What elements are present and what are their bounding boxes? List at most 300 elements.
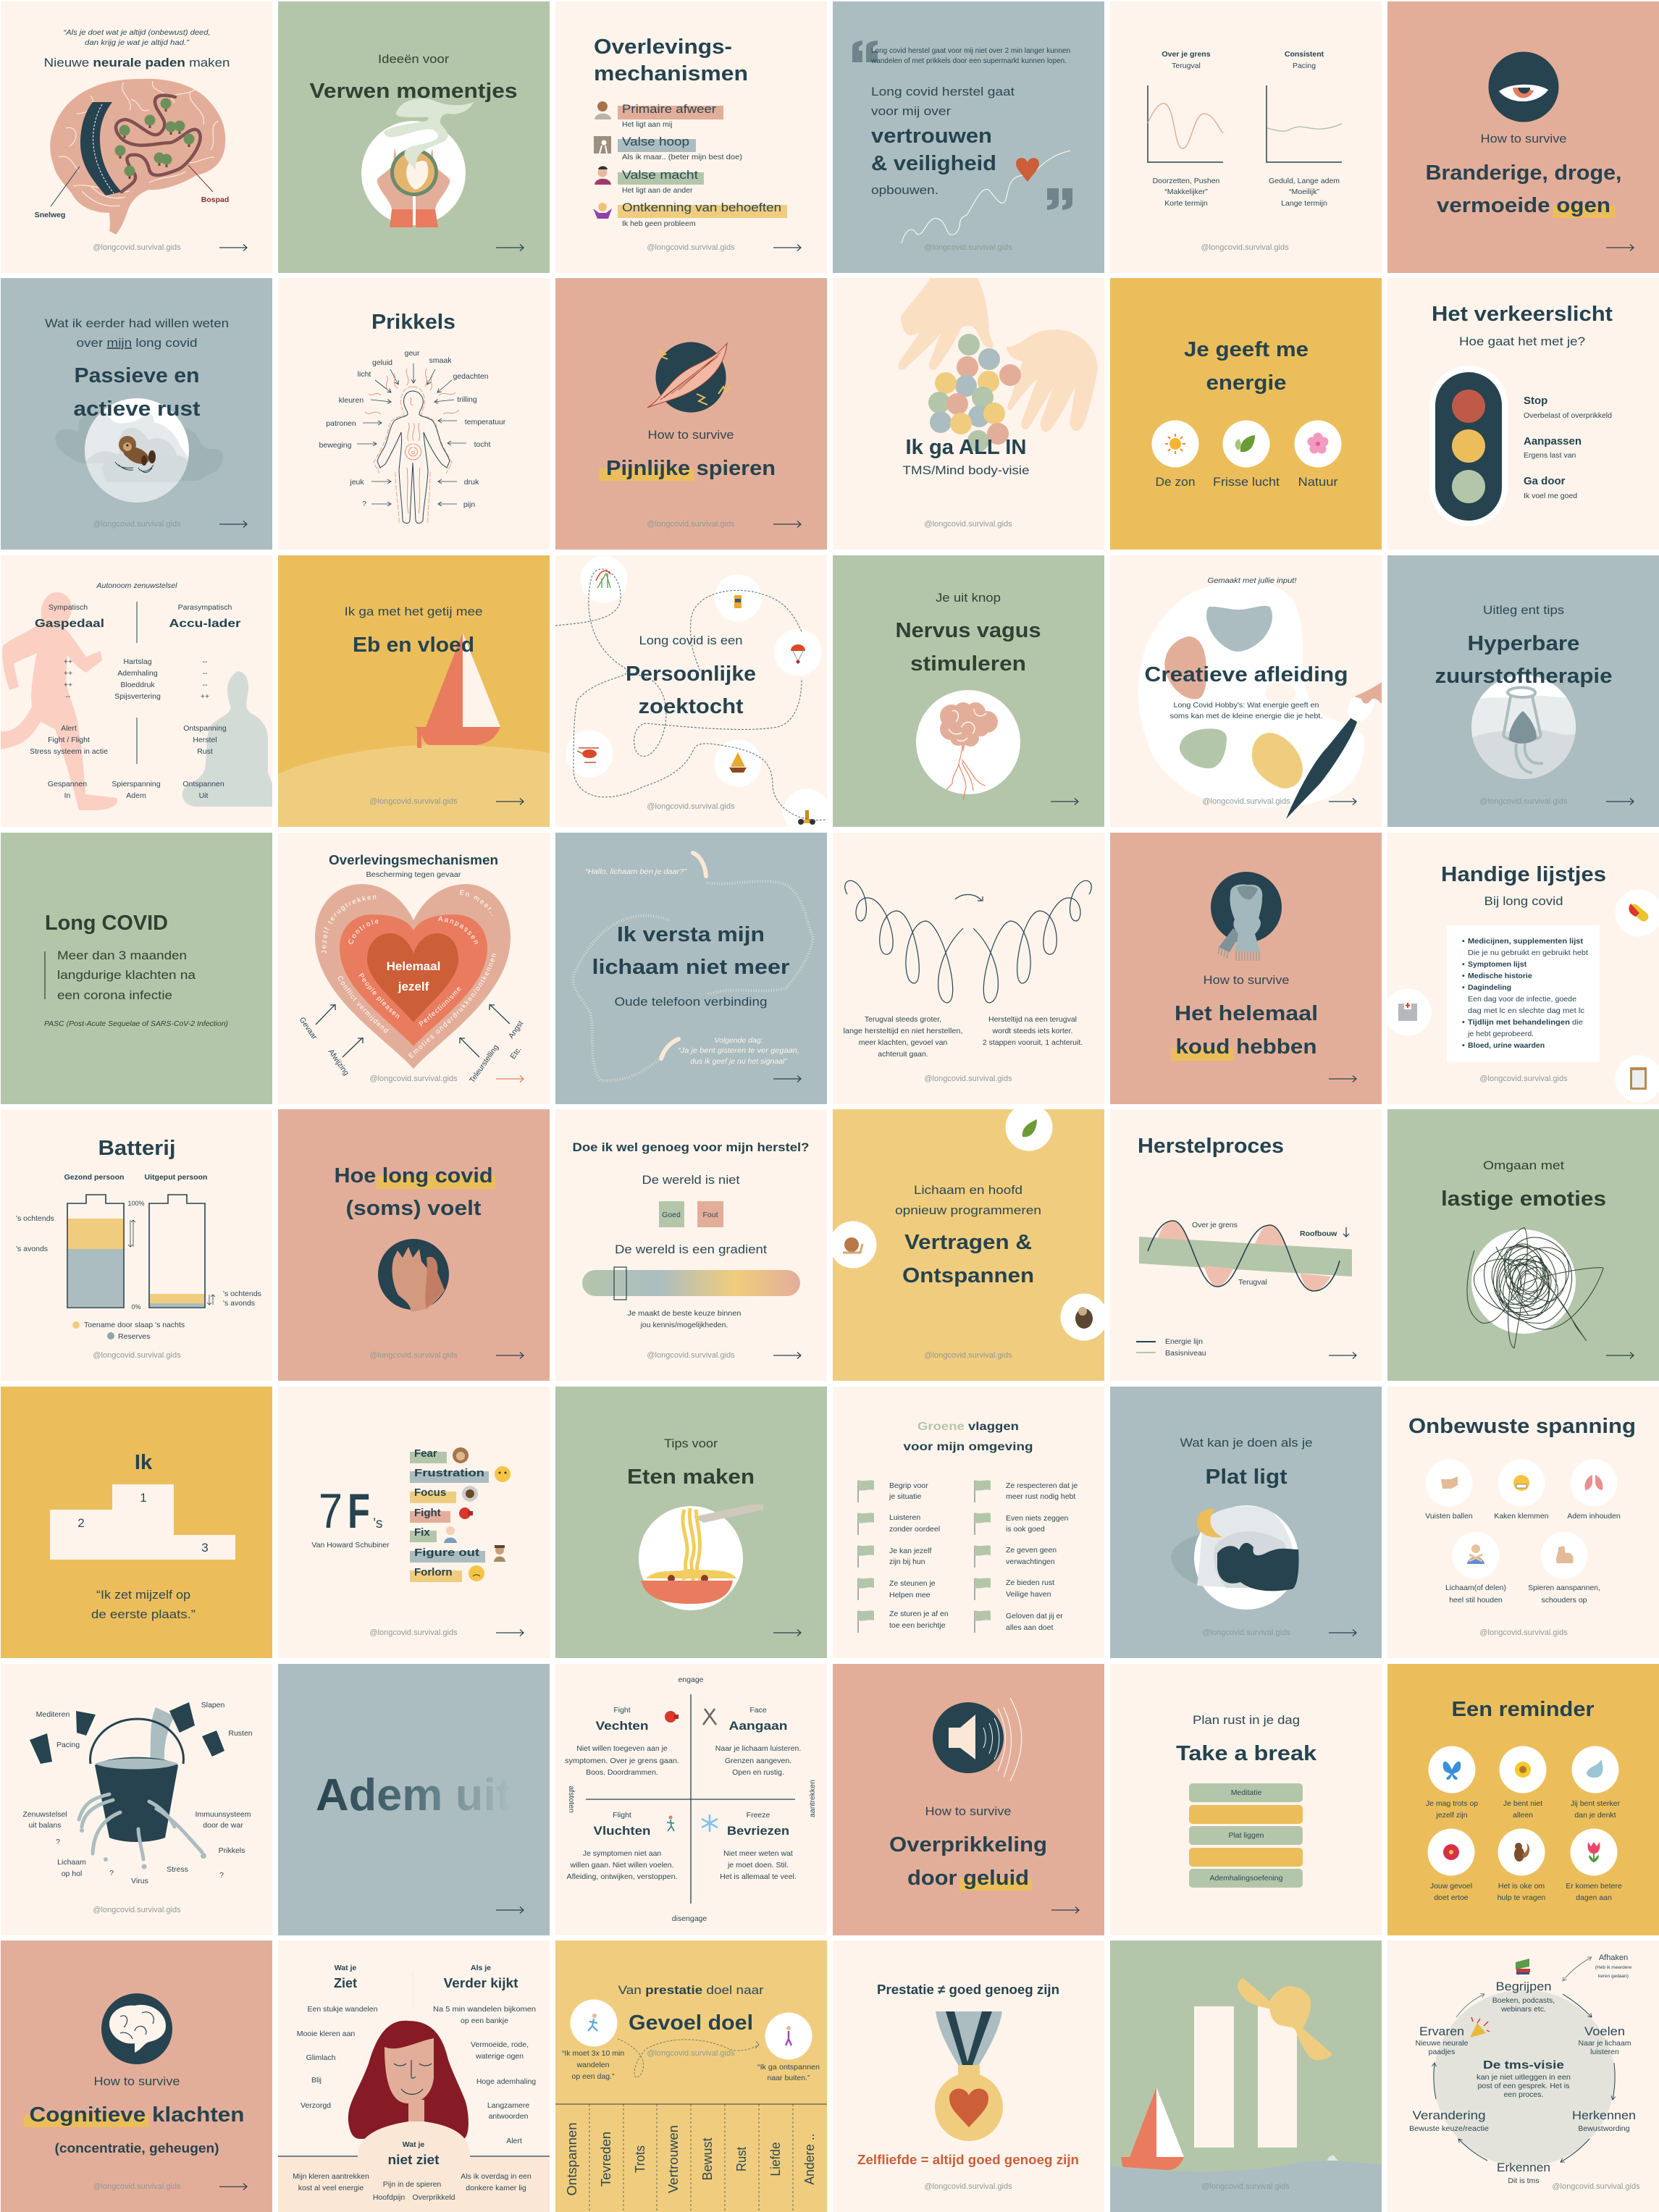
icon: hospital — [1385, 989, 1431, 1035]
labels: druk — [464, 478, 479, 487]
labels: Lichaam — [57, 1858, 86, 1867]
icon: muscle — [647, 342, 731, 413]
subtitle: over mijn long covid — [77, 336, 197, 350]
states: Herstel — [193, 736, 217, 744]
subtitle: Uitleg ent tips — [1483, 603, 1564, 617]
step: begrijpen: Begrijpen — [1496, 1980, 1551, 1993]
list: valse hoop: Als ik maar.. (beter mijn best doe) — [622, 153, 742, 161]
item: vuisten ballen: Vuisten ballen — [1425, 1512, 1473, 1521]
heading: Het verkeerslicht — [1432, 303, 1613, 326]
chart captions: “Moeilijk” — [1289, 188, 1320, 196]
labels and arrows: 's ochtends — [223, 1290, 261, 1298]
list panel — [1447, 925, 1600, 1062]
handle: @longcovid.survival.gids — [1202, 1628, 1290, 1637]
step: verandering: Verandering — [1412, 2108, 1486, 2122]
arrow — [1051, 798, 1078, 805]
panel: ik ga all in — [833, 278, 1104, 550]
quadrant: flight: Afleiding, ontwijken, verstoppen. — [566, 1872, 678, 1881]
text: right — [983, 1015, 1083, 1047]
text: right column: verwachtingen — [1006, 1557, 1055, 1566]
quote: second: dus ik geef je nu het signaal” — [690, 1057, 787, 1066]
panel: hyperbare zuurstoftherapie — [1387, 555, 1659, 827]
arrow — [773, 1076, 801, 1082]
labels: smaak — [429, 356, 452, 365]
main statement: voor mij over — [871, 104, 951, 118]
panel: vertrouwen quote — [833, 1, 1104, 273]
comparison table: -- — [203, 669, 208, 678]
text: left column: toe een berichtje — [889, 1621, 946, 1630]
illustration: sleeping figure — [1171, 1505, 1299, 1610]
diagram: nested hearts: Controle — [348, 920, 378, 944]
quadrant: fight: Boos. Doordrammen. — [586, 1768, 658, 1777]
breathing — [48, 781, 224, 798]
states: Stress systeem in actie — [30, 747, 108, 756]
chart: terugval — [1148, 85, 1223, 162]
illustration: hands with balls — [898, 278, 1098, 452]
comparison table: Ademhaling — [117, 669, 158, 678]
breathing: Uit — [199, 791, 208, 800]
heading: Ik — [135, 1451, 153, 1474]
icon: medal — [935, 2011, 1003, 2141]
panel: groene vlaggen — [833, 1387, 1104, 1658]
quote marks — [852, 41, 1072, 210]
labels: Zenuwstelsel — [22, 1810, 67, 1819]
handle: @longcovid.survival.gids — [1552, 2182, 1640, 2191]
heading — [902, 1231, 1034, 1287]
handle: @longcovid.survival.gids — [1479, 797, 1568, 806]
icon: clipboard — [1615, 1056, 1659, 1102]
heading: stimuleren — [910, 652, 1026, 676]
heading: Overlevingsmechanismen — [329, 853, 498, 867]
heading: Creatieve afleiding — [1144, 663, 1348, 686]
list panel: • — [1462, 1041, 1465, 1050]
heading: energie — [1206, 371, 1286, 395]
arrow — [1606, 798, 1634, 805]
afhaken note: (Heb ik meerdere — [1595, 1965, 1631, 1970]
text: left column: Ze sturen je af en — [889, 1610, 949, 1618]
highlight — [600, 468, 694, 481]
subtitle — [45, 316, 229, 350]
labels: Rusten — [228, 1729, 253, 1738]
conclusion: Zelfliefde = altijd goed genoeg zijn — [857, 2153, 1079, 2167]
panel: 7 Fs — [278, 1387, 550, 1658]
labels: Slapen — [201, 1701, 225, 1710]
labels: gedachten — [453, 372, 489, 381]
step: begrijpen — [1492, 1959, 1555, 2014]
handle: @longcovid.survival.gids — [93, 2182, 181, 2191]
heading — [1184, 338, 1309, 395]
comparison table: ++ — [201, 692, 209, 701]
chart: full battery — [67, 1195, 124, 1308]
subtitle: Long covid is een — [639, 634, 743, 647]
heading: Ontspannen — [902, 1264, 1034, 1287]
list: seven Fs: Fear — [414, 1447, 437, 1460]
subtitle: Omgaan met — [1483, 1158, 1564, 1172]
heading: door geluid — [907, 1867, 1029, 1890]
list panel: Dagindeling — [1468, 983, 1511, 992]
main statement — [871, 85, 1015, 197]
bottom band — [278, 2156, 550, 2212]
text: right: 2 stappen vooruit, 1 achteruit. — [983, 1038, 1083, 1047]
list panel: Tijdlijn met behandelingen die — [1468, 1018, 1583, 1027]
states: Fight / Flight — [48, 736, 90, 744]
dashed route — [555, 569, 827, 820]
heading — [74, 364, 201, 421]
icon: leaf — [1005, 1103, 1053, 1151]
icon: eye — [1489, 52, 1558, 122]
text: visible symptoms left: Mooie kleren aan — [297, 2030, 355, 2038]
labels: Immuunsysteem — [195, 1810, 251, 1819]
quadrant: freeze: Niet meer weten wat — [723, 1849, 793, 1858]
quadrant: flight: Flight — [613, 1811, 631, 1820]
legend — [72, 1321, 185, 1341]
step: herkennen: Herkennen — [1572, 2108, 1636, 2122]
labels: Prikkels — [219, 1846, 245, 1855]
text: visible symptoms left: Glimlach — [306, 2053, 336, 2062]
illustration: pasta bowl — [639, 1505, 763, 1610]
subtitle: Ik ga met het getij mee — [345, 605, 482, 618]
diagram: nested hearts — [315, 884, 511, 1069]
chart captions: Lange termijn — [1281, 199, 1327, 208]
description: Long Covid Hobby's: Wat energie geeft en — [1173, 701, 1319, 710]
text: visible symptoms left: Blij — [311, 2076, 322, 2085]
labels: temperatuur — [465, 418, 506, 426]
subtitle: Ideeën voor — [378, 52, 449, 66]
handle: @longcovid.survival.gids — [1479, 1628, 1568, 1637]
text: looking further right — [433, 2005, 536, 2145]
heading: Overlevings- — [594, 35, 732, 59]
diagram: nested hearts: Aanpassen — [438, 917, 478, 944]
heading: lastige emoties — [1441, 1187, 1606, 1211]
panel: overprikkeling door geluid — [833, 1664, 1104, 1935]
column headings: Wat je — [335, 1964, 356, 1972]
text: left — [843, 1015, 963, 1059]
text: left column: Ze steunen je — [889, 1579, 936, 1588]
icon: sloth — [1060, 1293, 1108, 1341]
top note: Gemaakt met jullie input! — [1208, 576, 1297, 585]
heading: Eb en vloed — [353, 634, 474, 657]
icon: snail — [830, 1221, 876, 1269]
step: verandering: Bewuste keuze/reactie — [1409, 2124, 1489, 2133]
list panel: • — [1462, 937, 1465, 946]
labels and arrows: 0% — [131, 1303, 141, 1311]
icon: seagull — [1327, 2156, 1338, 2161]
diagram: nested hearts: Conflict vermijdend — [338, 976, 389, 1033]
text: looking further right: Hoge ademhaling — [476, 2077, 536, 2086]
column titles: Terugval — [1172, 62, 1201, 70]
illustration: brain and vagus nerve — [916, 690, 1020, 800]
subtitle: Oude telefoon verbinding — [614, 995, 768, 1009]
arrow — [773, 521, 801, 527]
feelings column labels: Ontspannen — [565, 2122, 579, 2196]
labels: ? — [219, 1871, 224, 1880]
quadrant: face — [703, 1706, 801, 1777]
definition: Meer dan 3 maanden — [57, 949, 187, 962]
diagram: nested hearts: Emoties onderdrukken/ontkennen — [408, 954, 496, 1059]
quadrant: fight: Niet willen toegeven aan je — [576, 1744, 668, 1753]
handle: @longcovid.survival.gids — [647, 2049, 735, 2058]
labels: geur — [404, 349, 420, 358]
item: spieren aanspannen: Spieren aanspannen, — [1528, 1584, 1600, 1592]
labels: jeuk — [349, 478, 364, 487]
panel: pacing charts — [1110, 1, 1382, 273]
panel: passieve en actieve rust — [1, 278, 272, 550]
text: not visible: Pijn in de spieren — [383, 2180, 441, 2189]
panel: eb en vloed — [278, 555, 550, 827]
diagram: nested hearts: jezelf — [398, 980, 429, 993]
panel: cognitieve klachten — [1, 1940, 272, 2212]
handle: @longcovid.survival.gids — [369, 1628, 458, 1637]
labels: op hol — [62, 1870, 82, 1878]
heading: Prestatie ≠ goed genoeg zijn — [877, 1982, 1059, 1997]
panel: een reminder — [1387, 1664, 1659, 1935]
subtitle: How to survive — [1480, 132, 1567, 146]
heading: Overprikkeling — [889, 1833, 1047, 1856]
icon: hands holding coffee — [361, 98, 474, 227]
labels: tocht — [474, 440, 490, 449]
quotes: “Ik ga ontspannen — [757, 2063, 820, 2072]
column headings: Ziet — [334, 1976, 357, 1990]
quote: “Als je doet wat je altijd (onbewust) deed, — [64, 28, 210, 37]
title: 7Fs: Van Howard Schubiner — [311, 1541, 390, 1549]
heading — [1435, 632, 1612, 688]
labels: Stress — [167, 1865, 188, 1874]
icons: flags — [858, 1480, 991, 1633]
main statement: Long covid herstel gaat — [871, 85, 1015, 98]
item: kaken klemmen: Kaken klemmen — [1494, 1512, 1549, 1521]
quote — [64, 28, 210, 47]
handle: @longcovid.survival.gids — [93, 1906, 181, 1914]
subtitle: Bij long covid — [1484, 894, 1563, 908]
heading: vermoeide ogen — [1437, 194, 1610, 217]
axes: engage — [678, 1675, 704, 1684]
text: right column: meer rust nodig hebt — [1006, 1492, 1075, 1501]
heading: Een reminder — [1451, 1698, 1595, 1721]
heading: Take a break — [1176, 1742, 1317, 1765]
labels: De zon — [1156, 475, 1195, 489]
list panel: Medicijnen, supplementen lijst — [1468, 937, 1584, 946]
handle: @longcovid.survival.gids — [369, 1075, 458, 1083]
table lines — [555, 2103, 827, 2105]
heading: actieve rust — [74, 398, 201, 421]
panel: batterij — [1, 1109, 272, 1381]
feelings column labels: Liefde — [768, 2142, 783, 2177]
panel: overlevingsmechanismen hart — [278, 833, 550, 1104]
column headings: Als je — [471, 1964, 491, 1972]
quadrant: freeze: Bevriezen — [727, 1824, 789, 1838]
list panel: • — [1462, 960, 1465, 969]
chart: energy wave: Over je grens — [1192, 1221, 1238, 1229]
panel: ik podium — [1, 1387, 272, 1658]
heading: Branderige, droge, — [1425, 161, 1622, 185]
comparison table: -- — [203, 657, 208, 666]
column titles — [64, 1173, 207, 1182]
heading: Handige lijstjes — [1441, 863, 1606, 886]
subtitle: Van prestatie doel naar — [618, 1983, 764, 1997]
chart captions: “Makkelijker” — [1164, 188, 1208, 196]
icon: hands on face — [378, 1239, 449, 1312]
heading: Nervus vagus — [895, 619, 1041, 642]
arrow — [496, 1907, 524, 1913]
labels: geluid — [372, 358, 392, 367]
heading: lichaam niet meer — [592, 956, 789, 979]
legend — [1136, 1337, 1206, 1358]
arrow — [1329, 1353, 1356, 1358]
podium: 3 — [201, 1541, 209, 1555]
arrows — [357, 363, 466, 504]
list: primaire afweer: Het ligt aan mij — [622, 120, 672, 129]
item: adem inhouden: Adem inhouden — [1567, 1512, 1621, 1521]
quote: second: Volgende dag: — [714, 1036, 763, 1045]
text: left column: zijn bij hun — [889, 1557, 925, 1566]
text: left column: je situatie — [889, 1492, 922, 1501]
column titles — [1162, 50, 1324, 70]
afhaken note: keren gedaan) — [1598, 1974, 1629, 1979]
quadrant: freeze: Freeze — [747, 1811, 770, 1820]
handle: @longcovid.survival.gids — [924, 520, 1012, 529]
arrow — [1329, 1076, 1356, 1082]
step: begrijpen: webinars etc. — [1500, 2005, 1546, 2014]
arrow — [773, 1353, 801, 1358]
list: seven Fs: Fight — [414, 1507, 441, 1519]
small text: wandelen of met prikkels door een supermarkt kunnen lopen. — [870, 56, 1067, 65]
subtitle: How to survive — [94, 2074, 180, 2088]
step: verandering — [1409, 2108, 1489, 2133]
heading — [329, 853, 498, 879]
breathing: In — [64, 791, 71, 800]
panel: lastige emoties — [1387, 1109, 1659, 1381]
arrow — [496, 1629, 524, 1636]
labels — [319, 349, 506, 509]
subtitle: How to survive — [647, 428, 734, 442]
definition: een corona infectie — [57, 988, 172, 1002]
heading: Long COVID — [45, 912, 168, 935]
title: 7Fs — [311, 1484, 390, 1549]
arrows and triggers: Teleurstelling — [468, 1043, 500, 1085]
item: tulip: dagen aan — [1576, 1893, 1612, 1902]
panel: vertragen en ontspannen — [830, 1103, 1108, 1381]
arrows and triggers: Angst — [507, 1019, 525, 1040]
axes: afstoten — [567, 1786, 576, 1813]
illustration: looping lines — [845, 880, 1091, 1003]
afhaken note: Afhaken — [1599, 1954, 1628, 1962]
hill — [278, 744, 550, 827]
comparison table: -- — [65, 692, 71, 701]
axes — [567, 1675, 817, 1923]
item: chipmunk: hulp te vragen — [1498, 1893, 1545, 1902]
panel: hoe long covid voelt — [278, 1109, 550, 1381]
heading: zuurstoftherapie — [1435, 665, 1612, 688]
item: chipmunk: Het is oke om — [1498, 1882, 1545, 1891]
handle: @longcovid.survival.gids — [924, 1075, 1012, 1083]
comparison table: -- — [203, 681, 208, 689]
states: Alert — [61, 724, 77, 733]
list: seven Fs: Fix — [414, 1526, 430, 1539]
legend: Ga door — [1524, 475, 1566, 487]
labels — [1156, 475, 1338, 489]
step: voelen — [1579, 2024, 1631, 2056]
legend: Aanpassen — [1524, 435, 1582, 447]
heading — [1425, 161, 1622, 217]
text: looking further right: Langzamere — [487, 2101, 529, 2110]
text block — [627, 1309, 742, 1329]
legend: Basisniveau — [1165, 1349, 1206, 1358]
item: tulip — [1566, 1829, 1622, 1902]
illustration: brush — [1286, 682, 1382, 819]
heading: Passieve en — [74, 364, 200, 387]
icon: speaker — [933, 1698, 1022, 1781]
quadrant: face: Face — [749, 1706, 767, 1715]
illustration: body with nerves — [365, 369, 459, 524]
handle: @longcovid.survival.gids — [93, 520, 181, 529]
icon: flower — [1295, 420, 1341, 468]
list: seven Fs — [410, 1447, 489, 1582]
icons: white circles with vehicles — [566, 556, 830, 836]
text: right column: Veilige haven — [1006, 1590, 1051, 1599]
text: right: wordt steeds iets korter. — [992, 1027, 1072, 1035]
heading — [889, 1833, 1047, 1890]
icon: scarf — [1211, 872, 1282, 961]
heading: Verwen momentjes — [310, 80, 517, 103]
subtitle — [895, 1183, 1041, 1217]
icon: sailboat — [1121, 2087, 1184, 2170]
panel: overlevingsmechanismen list — [555, 1, 827, 273]
arrow — [1051, 1907, 1079, 1913]
illustration: palette — [1138, 581, 1364, 808]
subtitle: Je uit knop — [936, 591, 1001, 605]
panel: persoonlijke zoektocht — [555, 555, 830, 836]
text: right column — [1006, 1481, 1078, 1632]
text: not visible: Overprikkeld — [413, 2193, 455, 2202]
illustration: oxygen mask — [1467, 675, 1579, 787]
quadrant: freeze: Het is allemaal te veel. — [720, 1872, 797, 1881]
list: valse hoop — [618, 135, 742, 161]
panel: onbewuste spanning — [1387, 1387, 1659, 1658]
chart: energy wave: Roofbouw — [1300, 1229, 1337, 1238]
text block: jou kennis/mogelijkheden. — [640, 1321, 728, 1329]
arrow — [1329, 798, 1356, 805]
quadrant: freeze — [702, 1811, 797, 1881]
list: seven Fs: Forlorn — [414, 1566, 452, 1578]
step: ervaren — [1416, 2017, 1490, 2056]
list: ontkenning: Ik heb geen probleem — [622, 219, 696, 228]
schedule bars — [1189, 1783, 1303, 1888]
subtitle: opnieuw programmeren — [895, 1203, 1041, 1217]
icons: person emoji — [593, 101, 612, 219]
comparison table: Spijsvertering — [114, 692, 161, 701]
arrow — [496, 245, 524, 251]
handle: @longcovid.survival.gids — [1201, 2182, 1290, 2191]
panel: eten maken — [555, 1387, 827, 1658]
icon: brain with road and forest path: Snelweg — [35, 211, 65, 219]
panel: creatieve afleiding — [1110, 555, 1382, 827]
text: not visible: niet ziet — [388, 2153, 439, 2167]
description: soms kan met de kleine energie die je hebt. — [1170, 712, 1322, 720]
heading: Plat ligt — [1205, 1465, 1288, 1489]
arrow — [1329, 1629, 1356, 1636]
quadrant: face: Aangaan — [728, 1719, 788, 1733]
handle: @longcovid.survival.gids — [369, 797, 458, 806]
left and right headings: Sympatisch — [49, 603, 88, 612]
subtitle: Tips voor — [664, 1437, 718, 1450]
arrow — [1606, 245, 1634, 251]
arrow — [219, 245, 247, 251]
breathing: Adem — [126, 791, 146, 800]
arrows and triggers: Afwijzing — [327, 1048, 350, 1077]
arrow — [1606, 1353, 1634, 1358]
list: ontkenning — [618, 201, 787, 228]
quadrant: face: Naar je lichaam luisteren. — [715, 1744, 801, 1753]
